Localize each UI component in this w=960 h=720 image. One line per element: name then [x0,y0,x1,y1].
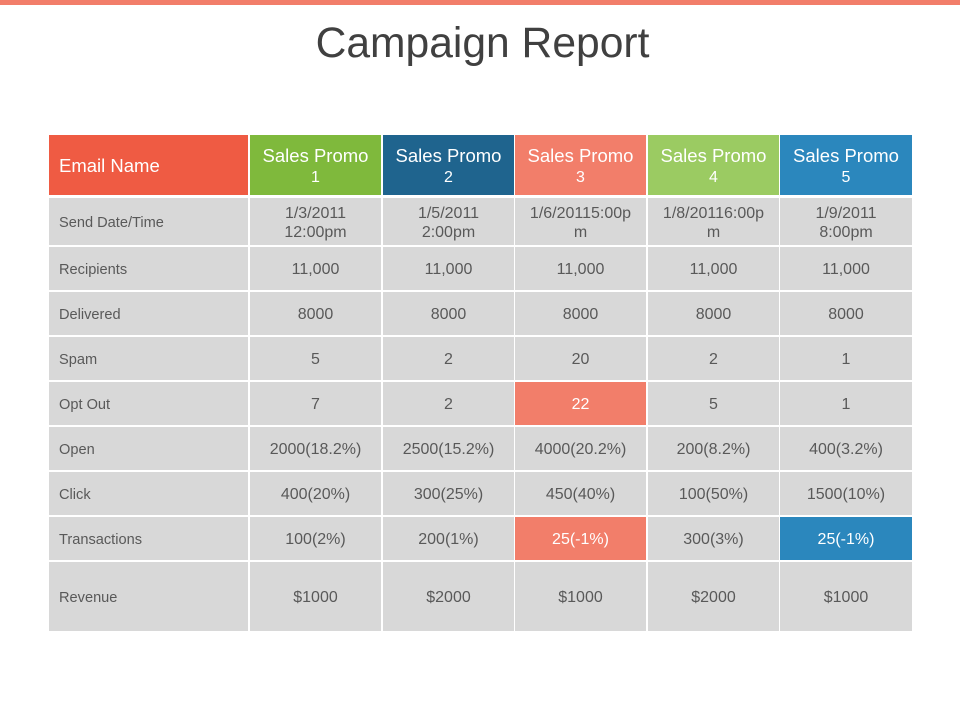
row: delivered: 8000 [828,306,864,323]
row: delivered: 8000 [298,306,333,323]
row: click: 100(50%) [679,486,748,503]
row: transactions: Transactions [59,532,142,548]
row: open: 2500(15.2%) [403,441,494,458]
row: opt out [49,382,912,425]
header: sales promo 5: Sales Promo [793,145,899,166]
row: click: Click [59,486,91,502]
row: opt out: 7 [311,396,320,413]
header row [49,135,912,195]
row: recipients: Recipients [59,262,127,278]
header: sales promo 3 [515,135,646,195]
highlighted cell: transactions sales promo 5: 25(-1%) [818,531,874,548]
title: Campaign Report [316,19,649,67]
row: revenue: $1000 [293,589,338,606]
row: transactions: 100(2%) [285,531,346,548]
row: recipients: 11,000 [425,261,472,278]
row: send date/time: 1/5/2011 [418,204,479,222]
row: open: 200(8.2%) [677,441,750,458]
header: sales promo 1 [250,135,381,195]
row: spam: 1 [842,351,850,368]
row: opt out: 2 [444,396,453,413]
row: send date/time: 1/6/20115:00p [530,204,631,222]
row: spam: Spam [59,352,97,368]
row: delivered: 8000 [563,306,598,323]
row: revenue: $1000 [824,589,868,606]
highlighted cell: transactions sales promo 5 [780,517,912,560]
row: open: 2000(18.2%) [270,441,361,458]
campaign table [49,135,912,631]
header: sales promo 5 [780,135,912,195]
row: send date/time: 8:00pm [819,224,873,240]
row: revenue: $2000 [691,589,736,606]
row: delivered: 8000 [696,306,731,323]
row: send date/time: Send Date/Time [59,214,164,230]
row: send date/time: 12:00pm [284,224,347,240]
highlighted cell: opt out 22 [515,382,646,425]
header: email name [49,135,248,195]
row: spam [49,337,912,380]
row: recipients: 11,000 [292,261,339,278]
header: sales promo 1: Sales Promo [263,145,368,166]
row: send date/time: 1/9/2011 [815,204,877,222]
row: open: Open [59,442,95,458]
row: transactions: 300(3%) [683,531,744,548]
row: revenue: Revenue [59,590,117,606]
header: sales promo 3: 3 [576,169,585,186]
header: sales promo 2 [383,135,514,195]
row: spam: 5 [311,351,320,368]
row: revenue: $1000 [558,589,603,606]
row: delivered: Delivered [59,306,121,322]
row: click: 1500(10%) [807,486,885,503]
row: spam: 2 [709,351,718,368]
row: transactions: 200(1%) [418,531,479,548]
row: send date/time [49,198,912,245]
row: opt out: 5 [709,396,718,413]
row: click: 300(25%) [414,486,483,503]
row: send date/time: 2:00pm [422,224,475,240]
header: email name: Email Name [59,154,160,176]
header: sales promo 4 [648,135,779,195]
row: click [49,472,912,515]
row: open: 400(3.2%) [809,441,883,458]
row: click: 400(20%) [281,486,350,503]
row: open: 4000(20.2%) [535,441,626,458]
row: send date/time: 1/8/20116:00p [663,204,764,222]
row: recipients: 11,000 [822,261,870,278]
header: sales promo 4: 4 [709,169,718,186]
row: recipients: 11,000 [690,261,737,278]
highlighted cell: transactions sales promo 3: 25(-1%) [552,531,609,548]
row: send date/time: 1/3/2011 [285,204,346,222]
row: open [49,427,912,470]
row: spam: 2 [444,351,453,368]
row: recipients [49,247,912,290]
row: recipients: 11,000 [557,261,604,278]
row: spam: 20 [572,351,589,368]
highlighted cell: transactions sales promo 3 [515,517,646,560]
row: opt out: 1 [842,396,850,413]
highlighted cell: opt out 22: 22 [572,396,589,413]
header: sales promo 4: Sales Promo [661,145,766,166]
header: sales promo 2: 2 [444,169,453,186]
header: sales promo 5: 5 [842,169,850,186]
row: send date/time: m [707,224,720,240]
header: sales promo 2: Sales Promo [396,145,501,166]
row: delivered [49,292,912,335]
header: sales promo 1: 1 [311,169,320,186]
row: delivered: 8000 [431,306,466,323]
row: revenue [49,562,912,631]
header: sales promo 3: Sales Promo [528,145,633,166]
row: revenue: $2000 [426,589,471,606]
top accent bar [0,0,960,5]
row: click: 450(40%) [546,486,615,503]
row: transactions [49,517,912,560]
row: opt out: Opt Out [59,396,110,412]
row: send date/time: m [574,224,587,240]
